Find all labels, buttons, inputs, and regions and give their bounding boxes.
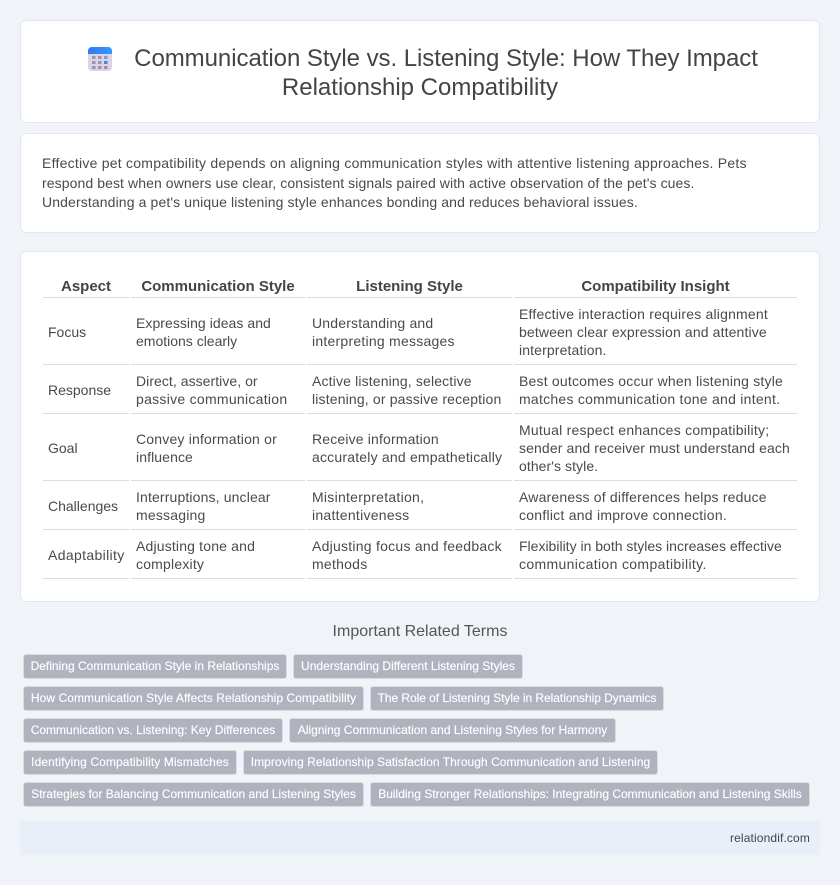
related terms tags: Identifying Compatibility Mismatches — [31, 755, 229, 769]
table rows: Awareness of differences helps reduce — [519, 489, 767, 505]
intro text: Understanding a pet's unique listening style enhances bonding and reduces behavioral issues. — [42, 194, 638, 210]
title: Communication Style vs. Listening Style: How They Impact — [134, 45, 758, 72]
table rows: Mutual respect enhances compatibility; — [519, 422, 769, 438]
table rows: conflict and improve connection. — [519, 507, 727, 523]
table rows: Active listening, selective — [312, 373, 472, 389]
table rows: matches communication tone and intent. — [519, 391, 780, 407]
table rows: Direct, assertive, or — [136, 373, 258, 389]
table rows: Focus — [48, 324, 86, 340]
table rows — [43, 297, 797, 579]
related terms tags: Communication vs. Listening: Key Differences — [31, 723, 275, 737]
footer source: relationdif.com — [730, 831, 810, 845]
table rows: complexity — [136, 556, 204, 572]
table rows: Expressing ideas and — [136, 315, 271, 331]
related terms tags: How Communication Style Affects Relationship Compatibility — [31, 691, 356, 705]
table rows: other's style. — [519, 458, 598, 474]
table rows: Response — [48, 382, 111, 398]
title — [134, 45, 758, 101]
comparison table: Communication Style — [141, 278, 295, 295]
related terms tags: Strategies for Balancing Communication and Listening Styles — [31, 787, 356, 801]
title: Relationship Compatibility — [282, 74, 558, 101]
table rows: influence — [136, 449, 193, 465]
related terms tags: Improving Relationship Satisfaction Through Communication and Listening — [251, 755, 650, 769]
related terms tags: Aligning Communication and Listening Styles for Harmony — [298, 723, 607, 737]
comparison table: Compatibility Insight — [581, 278, 730, 295]
table rows: communication compatibility. — [519, 556, 707, 572]
footer bar — [20, 821, 820, 855]
table rows: Adaptability — [48, 547, 125, 563]
table rows: Adjusting focus and feedback — [312, 538, 502, 554]
table rows: emotions clearly — [136, 333, 237, 349]
table rows: Receive information — [312, 431, 439, 447]
intro text: Effective pet compatibility depends on aligning communication styles with attentive listening approaches. Pets — [42, 155, 747, 171]
panel: introduction — [20, 133, 820, 233]
table header — [61, 278, 730, 295]
table rows: inattentiveness — [312, 507, 409, 523]
icon: calendar — [88, 47, 112, 71]
intro text: respond best when owners use clear, consistent signals paired with active observation of the pet's cues. — [42, 174, 695, 190]
table rows: Adjusting tone and — [136, 538, 255, 554]
table rows: passive communication — [136, 391, 287, 407]
table rows: Goal — [48, 440, 78, 456]
table rows: sender and receiver must understand each — [519, 440, 790, 456]
related terms tags: Defining Communication Style in Relationships — [31, 659, 279, 673]
related terms tags: Understanding Different Listening Styles — [301, 659, 515, 673]
table rows: Flexibility in both styles increases effective — [519, 538, 782, 554]
heading: related terms: Important Related Terms — [333, 623, 507, 640]
table rows: Challenges — [48, 498, 118, 514]
comparison table — [43, 278, 797, 579]
related terms tags: Building Stronger Relationships: Integrating Communication and Listening Skills — [378, 787, 802, 801]
intro text — [42, 155, 747, 210]
table rows: between clear expression and attentive — [519, 324, 767, 340]
table rows: Effective interaction requires alignment — [519, 306, 768, 322]
table rows: messaging — [136, 507, 206, 523]
table rows: Best outcomes occur when listening style — [519, 373, 783, 389]
table rows: Misinterpretation, — [312, 489, 424, 505]
table rows: listening, or passive reception — [312, 391, 501, 407]
table rows: interpreting messages — [312, 333, 455, 349]
comparison table: Listening Style — [356, 278, 463, 295]
panel: comparison table — [20, 251, 820, 602]
related terms tags — [23, 654, 810, 807]
table rows: accurately and empathetically — [312, 449, 502, 465]
related terms tags: The Role of Listening Style in Relationship Dynamics — [378, 691, 656, 705]
panel: title header — [20, 20, 820, 123]
table rows: Interruptions, unclear — [136, 489, 271, 505]
table rows: Understanding and — [312, 315, 433, 331]
table rows: interpretation. — [519, 342, 607, 358]
comparison table: Aspect — [61, 278, 111, 295]
table rows: methods — [312, 556, 367, 572]
table rows: Convey information or — [136, 431, 277, 447]
